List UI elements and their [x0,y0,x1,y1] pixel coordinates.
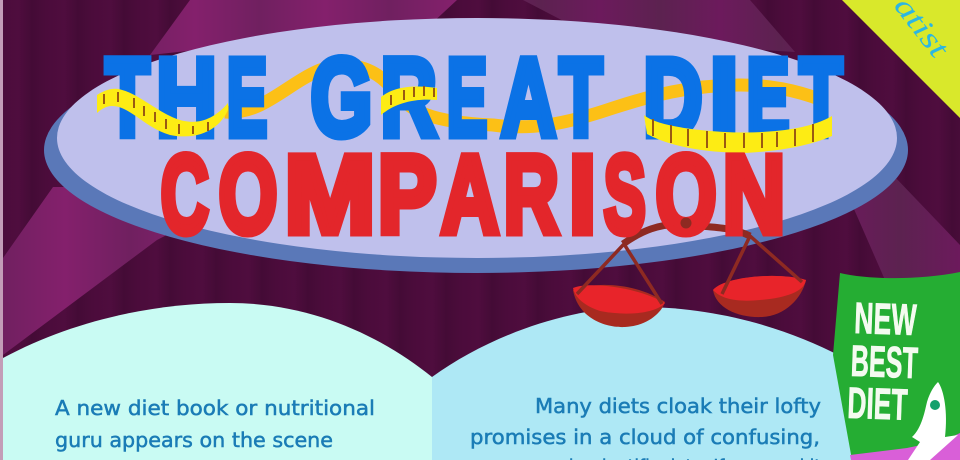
title line one: G [311,36,372,160]
background rays [3,0,960,355]
title line one: A [501,36,556,160]
title line one: R [381,36,437,160]
measuring tape back section [225,65,822,127]
title line two: I [569,134,596,256]
icon: rocket [908,382,958,460]
title line two: S [604,134,646,256]
title line one: I [710,36,738,160]
title line two: O [219,134,277,256]
title line two: A [441,134,499,256]
title line two: O [656,134,716,256]
scale beam [623,224,750,244]
left body text: guru appears on the scene [55,428,333,452]
title line one: E [447,36,487,160]
green new best diet flag [833,272,960,460]
left text panel [3,303,432,460]
title line one: T [105,36,150,160]
right text panel [432,307,860,460]
title ellipse plate [44,18,908,273]
title line one: H [156,36,217,160]
title line two [161,134,785,256]
title line one [105,36,842,160]
flag text [847,294,920,430]
title line one: T [799,36,842,160]
title line two: N [723,134,785,256]
right body text: Many diets cloak their lofty [535,394,821,418]
flag text: NEW [854,294,918,345]
left edge strip [0,0,3,460]
title line two: M [284,134,375,256]
lime corner banner [842,0,960,118]
right body text: promises in a cloud of confusing, [470,425,820,449]
measuring tape front sections [97,86,832,153]
pink ribbon [850,433,960,460]
right body text [470,394,821,460]
title line two: P [378,134,436,256]
balance scale [573,218,806,327]
title line one: E [746,36,790,160]
title line one: T [559,36,602,160]
flag text: DIET [847,379,908,430]
title line one: E [227,36,267,160]
title line one: D [643,36,703,160]
left body text [55,396,375,460]
title line two: C [161,134,209,256]
title line two: R [504,134,559,256]
left body text: A new diet book or nutritional [55,396,375,420]
